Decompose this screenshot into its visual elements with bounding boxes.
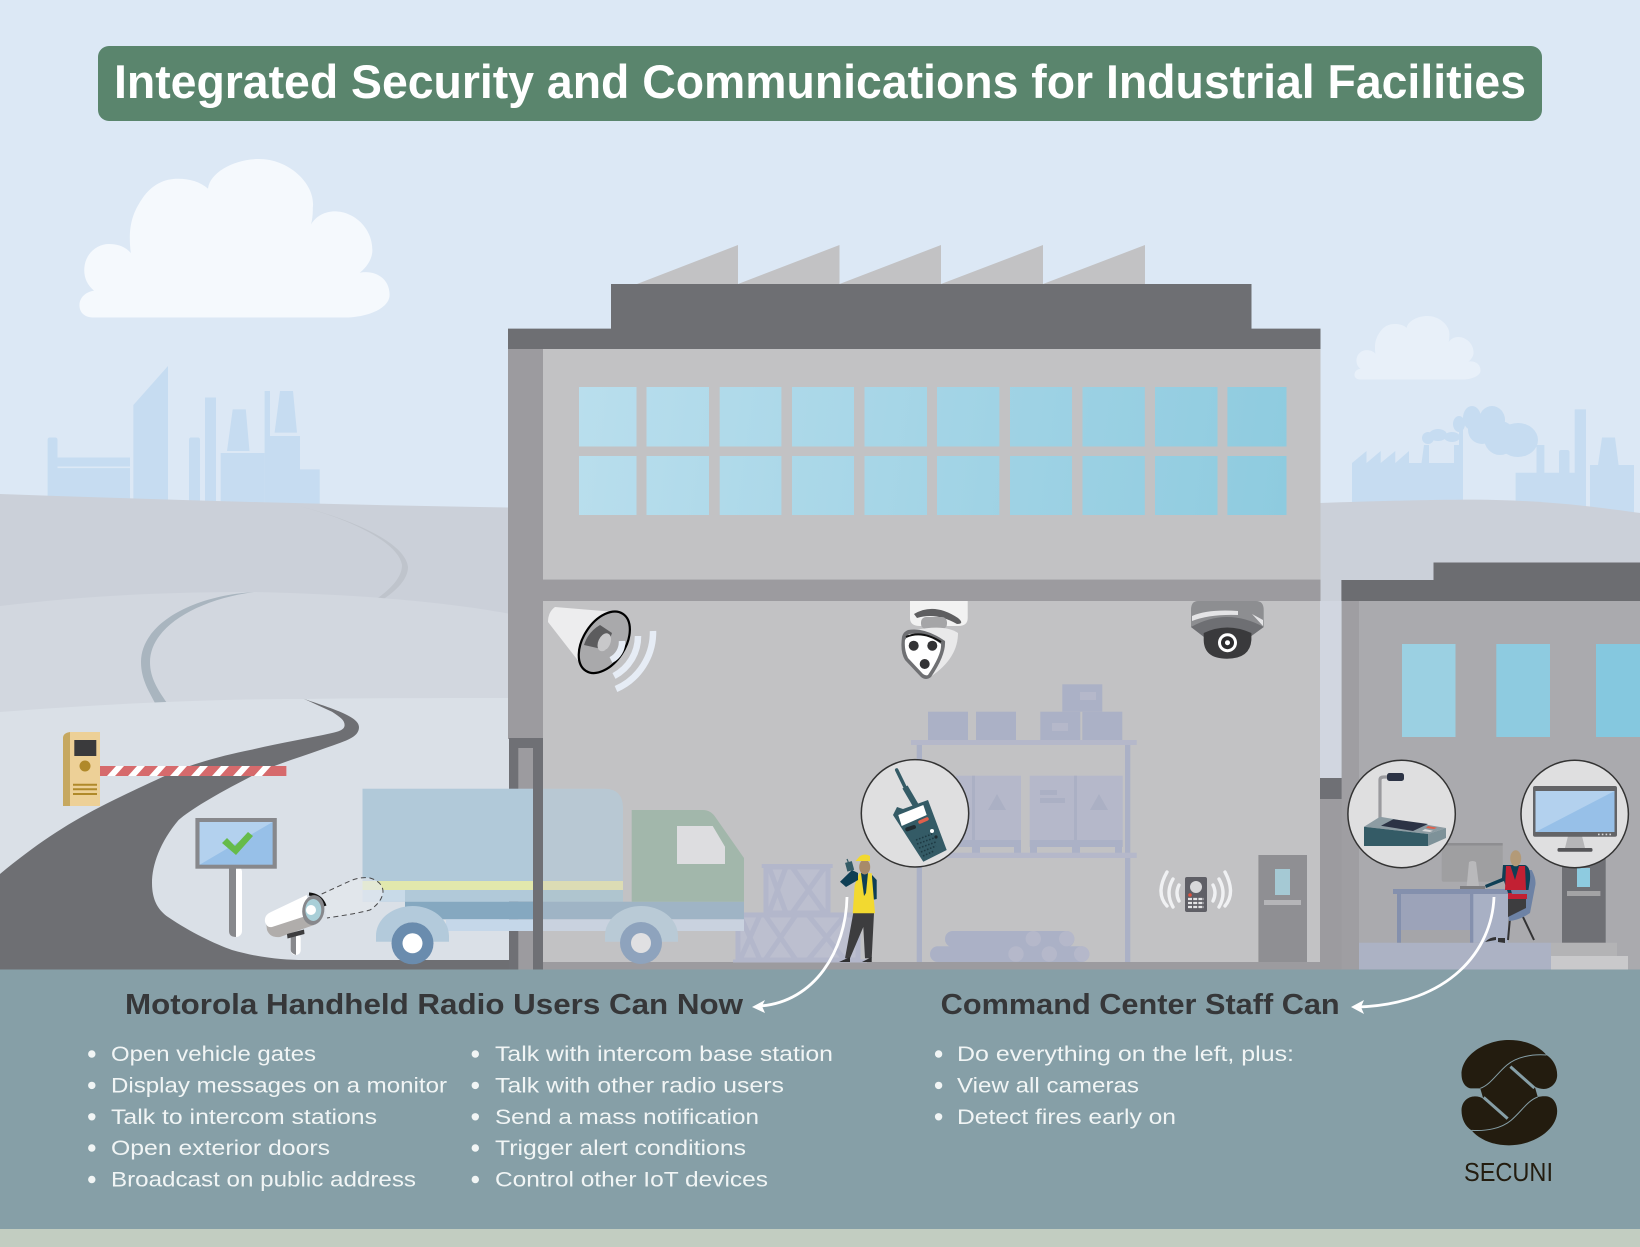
annex door (1562, 840, 1606, 943)
truck muted interior section (543, 789, 744, 931)
bullet list column 3: Detect fires early on (957, 1106, 1176, 1129)
bottom strip (0, 1229, 1640, 1247)
middle winding road (141, 592, 254, 703)
warehouse shelving (911, 684, 1137, 962)
SECUNI logo: SECUNI (1464, 1157, 1553, 1187)
sawtooth roof (637, 245, 1145, 284)
far winding road (290, 504, 408, 602)
bullet list column 1: Talk to intercom stations (111, 1106, 377, 1129)
multi-lens camera (901, 601, 968, 679)
far hills (0, 494, 508, 620)
bullet list column 1: Open exterior doors (111, 1137, 330, 1160)
speaker horn (548, 602, 653, 689)
title banner (98, 46, 1542, 121)
main road (0, 699, 509, 970)
arrow from worker to radio heading (752, 897, 847, 1013)
operator desk (1393, 889, 1510, 943)
door frame column (533, 738, 543, 970)
arrow from operator to command heading (1351, 897, 1494, 1014)
annex windows (1402, 644, 1640, 737)
dome camera (1191, 601, 1264, 659)
upper windows (579, 387, 1286, 515)
truck front wheel (605, 906, 678, 964)
large cloud (79, 159, 390, 318)
truck cab (632, 810, 744, 902)
heading: radio users: Motorola Handheld Radio Users Can Now (125, 989, 743, 1021)
bullet list column 3: Do everything on the left, plus: (957, 1043, 1294, 1066)
outdoor security camera (265, 878, 383, 955)
desktop monitor behind desk (1442, 843, 1503, 889)
bullet list column 2: Send a mass notification (495, 1106, 759, 1129)
bullet list column 3 (935, 1043, 1294, 1129)
title banner: Integrated Security and Communications for Industrial Facilities (114, 55, 1526, 108)
bullet list column 1: Display messages on a monitor (111, 1074, 447, 1097)
small cloud (1354, 316, 1481, 380)
bullet list column 2: Talk with other radio users (495, 1074, 784, 1097)
building main wall (508, 349, 1320, 970)
seated operator (1485, 850, 1536, 943)
warehouse door (1258, 855, 1307, 962)
gate barrier arm (100, 766, 286, 776)
truck cargo box (362, 789, 534, 931)
gate intercom box (63, 732, 100, 806)
SECUNI logo (1462, 1040, 1557, 1187)
bullet list column 3: View all cameras (957, 1074, 1139, 1097)
ground text panel (0, 970, 1640, 1229)
bullet list column 2: Talk with intercom base station (495, 1043, 833, 1066)
left city skyline (48, 366, 320, 523)
radio callout circle (861, 760, 969, 867)
annex building (1341, 562, 1640, 970)
bullet list column 1 (88, 1043, 447, 1192)
bullet list column 2: Control other IoT devices (495, 1168, 768, 1192)
worker with radio (839, 854, 877, 962)
crates (733, 864, 867, 961)
bullet list column 2 (472, 1043, 833, 1192)
bullet list column 1: Broadcast on public address (111, 1168, 416, 1192)
middle hill (0, 592, 508, 720)
heading: command center staff: Command Center Staff Can (941, 989, 1340, 1021)
bullet list column 2: Trigger alert conditions (495, 1137, 746, 1160)
monitor callout circle (1521, 760, 1628, 868)
command center floor and steps (1359, 943, 1628, 970)
console callout circle (1348, 760, 1455, 868)
bullet list column 1: Open vehicle gates (111, 1043, 316, 1066)
gap between buildings (1320, 601, 1342, 970)
intercom station with signal waves (1161, 872, 1230, 912)
building roof (508, 284, 1320, 349)
truck rear wheel (376, 906, 449, 964)
front hill (0, 698, 510, 970)
right city skyline (1352, 406, 1634, 525)
message monitor sign (195, 818, 277, 937)
